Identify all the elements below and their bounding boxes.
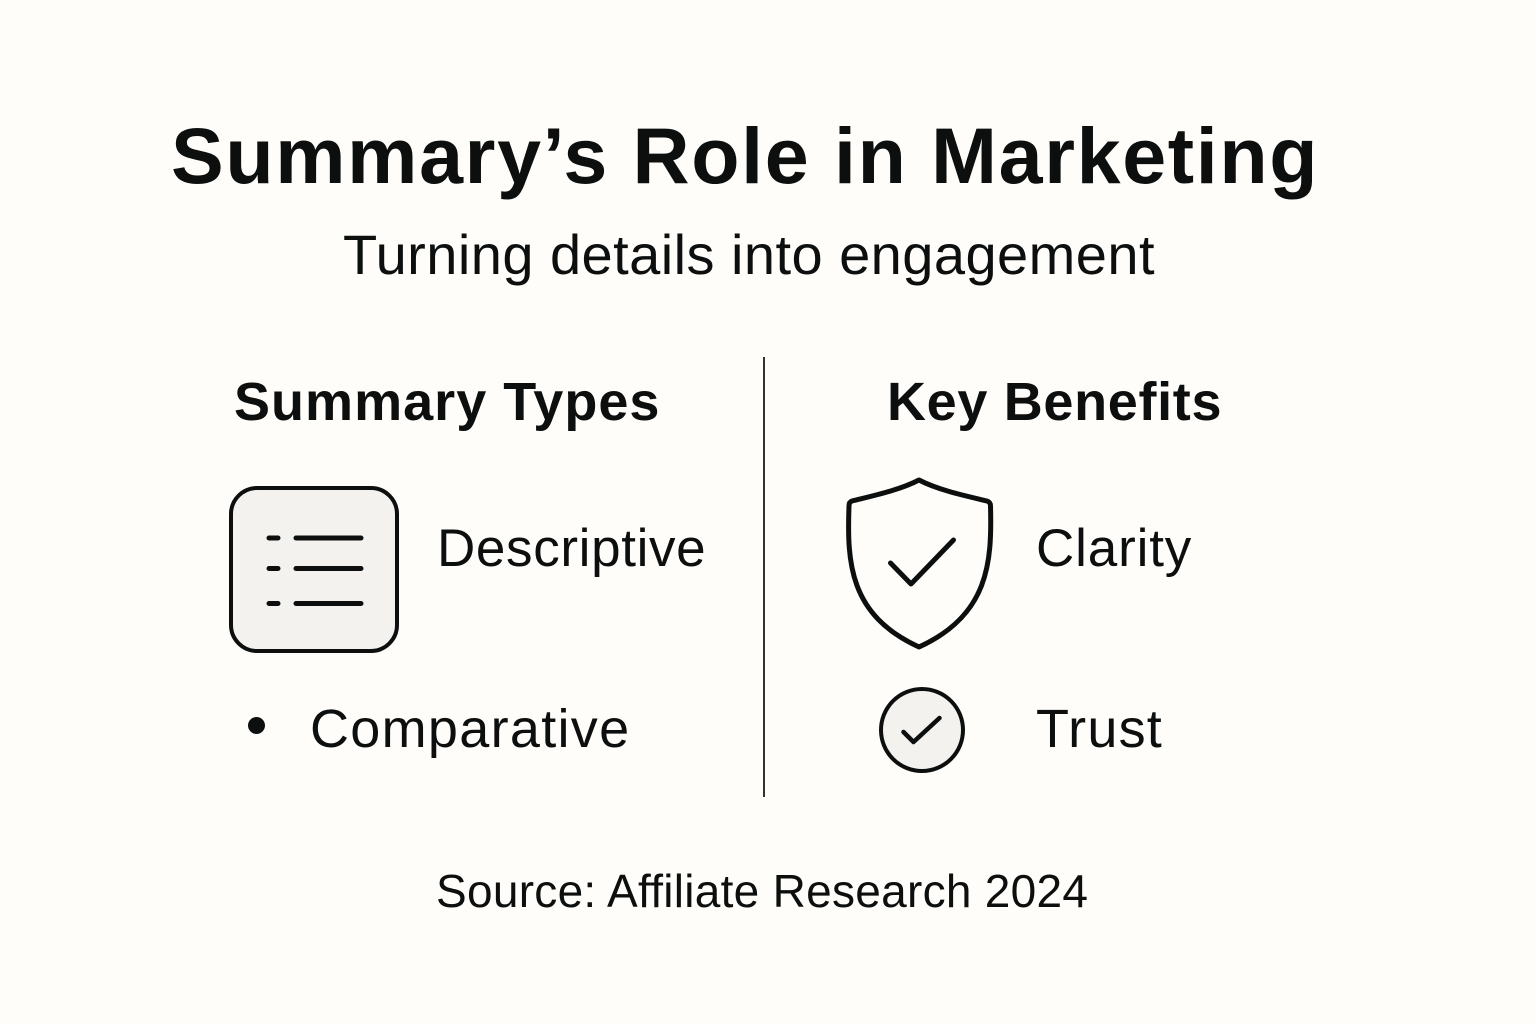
label: comparative: Comparative xyxy=(310,699,630,759)
heading: summary types: Summary Types xyxy=(234,372,660,432)
icon: list xyxy=(229,486,399,653)
icon: shield xyxy=(846,478,994,650)
heading: key benefits: Key Benefits xyxy=(887,372,1222,432)
source note: Source: Affiliate Research 2024 xyxy=(436,865,1088,917)
label: clarity: Clarity xyxy=(1036,519,1192,578)
title: Summary’s Role in Marketing xyxy=(171,111,1319,200)
icon: check circle xyxy=(879,687,965,773)
label: descriptive: Descriptive xyxy=(437,519,706,578)
icon: bullet xyxy=(248,717,265,734)
subtitle: Turning details into engagement xyxy=(343,223,1155,286)
label: trust: Trust xyxy=(1036,699,1163,759)
divider line xyxy=(763,357,765,797)
